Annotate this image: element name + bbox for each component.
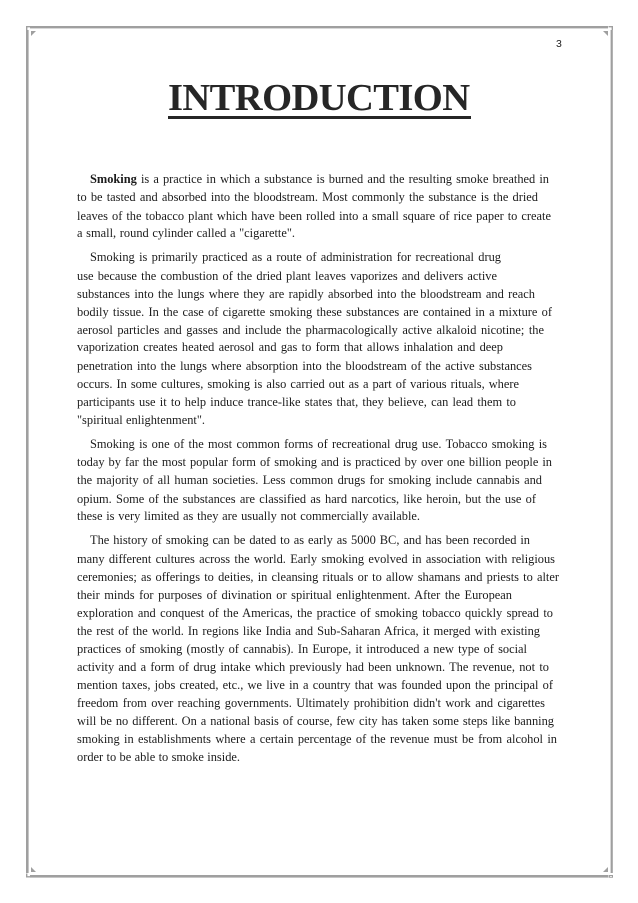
paragraph 4: history of smoking: freedom from over reaching governments. Ultimately prohibition didn't work and cigarettes — [77, 696, 545, 710]
page number: 3 — [556, 38, 562, 50]
paragraph 2: route of administration: bodily tissue. In the case of cigarette smoking these substances are contained in a mixture of — [77, 305, 552, 319]
paragraph 2: route of administration: aerosol particles and gasses and include the pharmacologically active alkaloid nicotine; the — [77, 323, 544, 337]
paragraph 2: route of administration: "spiritual enlightenment". — [77, 413, 205, 427]
title: INTRODUCTION — [168, 77, 469, 119]
paragraph 2: route of administration: Smoking is primarily practiced as a route of administration for recreational drug — [90, 250, 501, 264]
paragraph 4: history of smoking: many different cultures across the world. Early smoking evolved in association with religious — [77, 552, 555, 566]
paragraph 4: history of smoking — [77, 533, 559, 764]
paragraph 1: definition of smoking — [77, 172, 551, 240]
paragraph 4: history of smoking: will be no different. On a national basis of course, few city has taken some steps like banning — [77, 714, 554, 728]
paragraph 4: history of smoking: The history of smoking can be dated to as early as 5000 BC, and has been recorded in — [90, 533, 530, 547]
paragraph 1: definition of smoking: Smoking is a practice in which a substance is burned and the resulting smoke breathed in — [90, 172, 549, 186]
paragraph 4: history of smoking: the rest of the world. In regions like India and Sub-Saharan Africa, it merged with existing — [77, 624, 540, 638]
paragraph 4: history of smoking: smoking in establishments where a certain percentage of the revenue must be from alcohol in — [77, 732, 557, 746]
paragraph 3: recreational drug use: today by far the most popular form of smoking and is practiced by over one billion people in — [77, 455, 552, 469]
paragraph 2: route of administration: participants use it to help induce trance-like states that, they believe, can lead them to — [77, 395, 516, 409]
paragraph 2: route of administration: vaporization creates heated aerosol and gas to form that allows inhalation and deep — [77, 340, 503, 354]
paragraph 3: recreational drug use: the majority of all human societies. Less common drugs for smoking include cannabis and — [77, 473, 542, 487]
paragraph 4: history of smoking: order to be able to smoke inside. — [77, 750, 240, 764]
paragraph 3: recreational drug use: Smoking is one of the most common forms of recreational drug use. Tobacco smoking is — [90, 437, 547, 451]
paragraph 2: route of administration: use because the combustion of the dried plant leaves vaporizes and delivers active — [77, 269, 497, 283]
paragraph 1: definition of smoking: leaves of the tobacco plant which have been rolled into a small square of rice paper to create — [77, 209, 551, 223]
paragraph 4: history of smoking: exploration and conquest of the Americas, the practice of smoking tobacco quickly spread to — [77, 606, 553, 620]
paragraph 4: history of smoking: ceremonies; as offerings to deities, in cleansing rituals or to allow shamans and priests to alter — [77, 570, 559, 584]
paragraph 4: history of smoking: activity and a form of drug intake which previously had been unknown. The revenue, not to — [77, 660, 549, 674]
paragraph 2: route of administration: penetration into the lungs where absorption into the bloodstream of the active substances — [77, 359, 532, 373]
paragraph 2: route of administration: occurs. In some cultures, smoking is also carried out as a part of various rituals, where — [77, 377, 519, 391]
paragraph 4: history of smoking: mention taxes, jobs created, etc., we live in a country that was founded upon the principal of — [77, 678, 553, 692]
paragraph 3: recreational drug use: opium. Some of the substances are classified as hard narcotics, like heroin, but the use of — [77, 492, 536, 506]
paragraph 2: route of administration — [77, 250, 552, 427]
paragraph 1: definition of smoking: to be tasted and absorbed into the bloodstream. Most commonly the substance is the dried — [77, 190, 538, 204]
paragraph 2: route of administration: substances into the lungs where they are rapidly absorbed into the bloodstream and reach — [77, 287, 535, 301]
paragraph 4: history of smoking: practices of smoking (mostly of cannabis). In Europe, it introduced a new type of social — [77, 642, 527, 656]
paragraph 3: recreational drug use — [77, 437, 552, 523]
paragraph 3: recreational drug use: these is very limited as they are usually not commercially available. — [77, 509, 420, 523]
paragraph 1: definition of smoking: a small, round cylinder called a "cigarette". — [77, 226, 295, 240]
paragraph 4: history of smoking: their minds for purposes of divination or spiritual enlightenment. After the European — [77, 588, 512, 602]
